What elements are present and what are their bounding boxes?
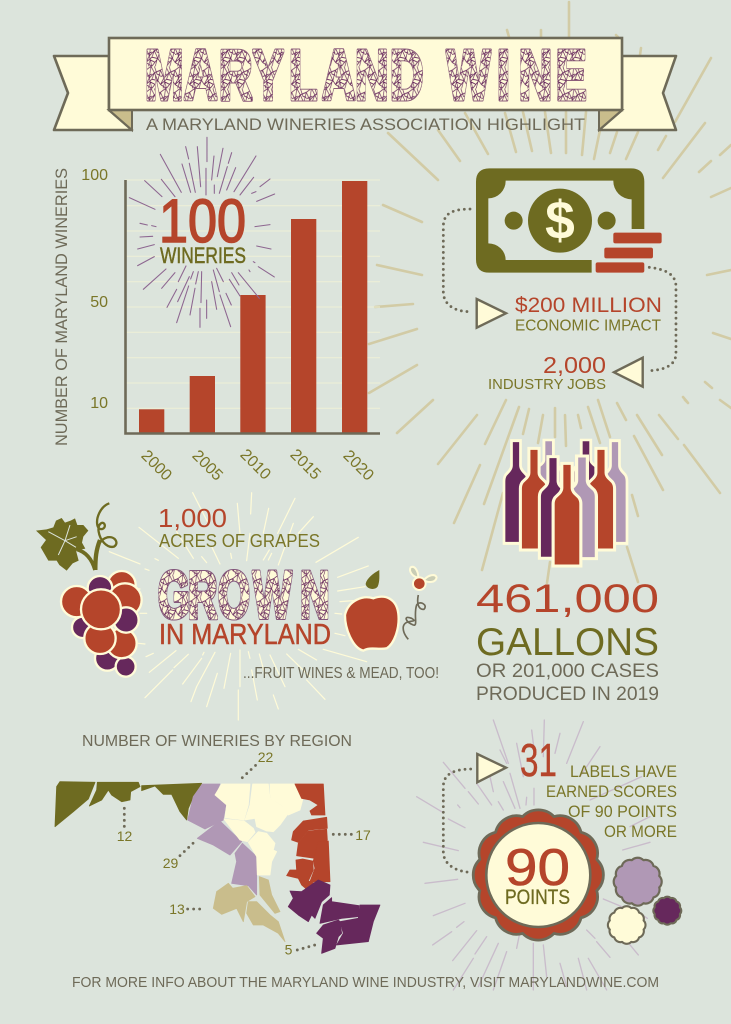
- stat: 31: 31: [520, 734, 557, 786]
- bars: [139, 181, 367, 433]
- title banner: [54, 35, 676, 130]
- panel: bar chart: [53, 137, 380, 484]
- dotted connector: [443, 769, 471, 872]
- stat: economic value: $200 MILLION: [515, 293, 662, 317]
- map heading: NUMBER OF WINERIES BY REGION: [82, 733, 352, 750]
- stat: cases: OR 201,000 CASES: [476, 661, 659, 682]
- x axis labels: 2000: [138, 447, 175, 484]
- region: western: [55, 782, 202, 827]
- icon: wine bottles: [504, 440, 627, 566]
- lilac sunburst: [417, 720, 650, 990]
- region counts: 12: [117, 828, 132, 844]
- banner right fold: [599, 110, 622, 130]
- stat: jobs value: 2,000: [543, 352, 606, 378]
- icon: grape leaf and vine: [36, 503, 116, 571]
- icon: grape cluster: [61, 571, 142, 677]
- cream sunburst: [109, 493, 368, 720]
- y axis labels: 50: [90, 294, 108, 311]
- title: MARYLAND WINE: [145, 35, 587, 114]
- subtitle: A MARYLAND WINERIES ASSOCIATION HIGHLIGHT: [146, 116, 585, 134]
- callout: 100 wineries: [159, 187, 246, 268]
- note: fruit wines: ...FRUIT WINES & MEAD, TOO!: [243, 665, 439, 682]
- stat label: EARNED SCORES: [546, 783, 677, 801]
- stat label: [546, 763, 677, 841]
- x axis labels: 2005: [189, 447, 226, 484]
- icon: banknote: $: [545, 191, 575, 250]
- dotted connector left: [443, 209, 470, 312]
- icon: banknote: [476, 168, 662, 273]
- axes: [126, 180, 380, 434]
- y axis title: NUMBER OF MARYLAND WINERIES: [53, 168, 71, 446]
- region counts: 17: [355, 827, 371, 843]
- gridlines: [125, 180, 380, 408]
- region: upper eastern shore: [287, 784, 330, 891]
- region: central: [215, 784, 303, 875]
- stat label: OF 90 POINTS: [568, 803, 677, 821]
- banner main: [109, 38, 622, 110]
- stat: jobs label: INDUSTRY JOBS: [488, 376, 606, 393]
- callout label: WINERIES: [160, 243, 246, 268]
- purple sunburst: [129, 137, 275, 327]
- heading: in maryland: IN MARYLAND: [159, 619, 331, 651]
- panel: 90 points: [417, 720, 681, 990]
- icon: purple seal: [653, 897, 681, 925]
- dotted connector right: [649, 267, 676, 371]
- region counts: 5: [285, 942, 293, 958]
- icon: lilac seal: [614, 858, 662, 906]
- stat: produced year: PRODUCED IN 2019: [476, 684, 659, 705]
- icon: flower and tendril: [403, 567, 437, 639]
- y axis labels: [81, 167, 108, 412]
- dotted leaders: [124, 765, 352, 950]
- stat: acres label: ACRES OF GRAPES: [159, 531, 320, 551]
- panel: economic impact: [443, 168, 676, 393]
- region counts: [117, 749, 371, 958]
- y axis labels: 10: [90, 395, 108, 412]
- x axis labels: 2010: [237, 446, 274, 483]
- x axis labels: 2020: [340, 447, 377, 484]
- heading: grown: GROWN: [158, 557, 330, 632]
- icon: cream seal: [608, 906, 646, 944]
- region counts: 29: [163, 855, 178, 871]
- arrow: left triangle: [614, 358, 643, 387]
- stat: acres value: 1,000: [158, 503, 227, 533]
- icon: main seal: [473, 810, 603, 940]
- region: southern: [213, 877, 285, 942]
- banner left fold: [109, 110, 132, 130]
- panel: production: [476, 440, 659, 705]
- callout number: 100: [159, 187, 246, 255]
- tan sunburst: [369, 2, 731, 583]
- arrow: right triangle: [477, 299, 506, 328]
- icon: apple: [345, 570, 399, 651]
- banner left tail: [54, 56, 132, 130]
- y axis labels: 100: [81, 167, 108, 184]
- seal label: POINTS: [505, 886, 570, 909]
- stat: gallons label: GALLONS: [476, 621, 659, 664]
- stat label: OR MORE: [604, 823, 677, 841]
- region: lower eastern shore: [288, 880, 380, 953]
- map of Maryland: [55, 782, 380, 953]
- arrow: triangle: [477, 754, 506, 782]
- x axis labels: 2015: [287, 446, 324, 483]
- footer: FOR MORE INFO ABOUT THE MARYLAND WINE INDUSTRY, VISIT MARYLANDWINE.COM: [72, 974, 659, 991]
- region: capital: [188, 784, 257, 895]
- panel: grapes: [36, 493, 439, 720]
- seal number: 90: [505, 839, 570, 897]
- x axis labels: [138, 446, 377, 484]
- region counts: 13: [169, 901, 185, 917]
- stat: economic label: ECONOMIC IMPACT: [515, 318, 662, 334]
- region counts: 22: [258, 749, 273, 765]
- panel: regional map: [55, 733, 380, 958]
- stat: gallons value: 461,000: [476, 577, 659, 621]
- banner right tail: [599, 56, 676, 130]
- stat label: LABELS HAVE: [570, 763, 677, 781]
